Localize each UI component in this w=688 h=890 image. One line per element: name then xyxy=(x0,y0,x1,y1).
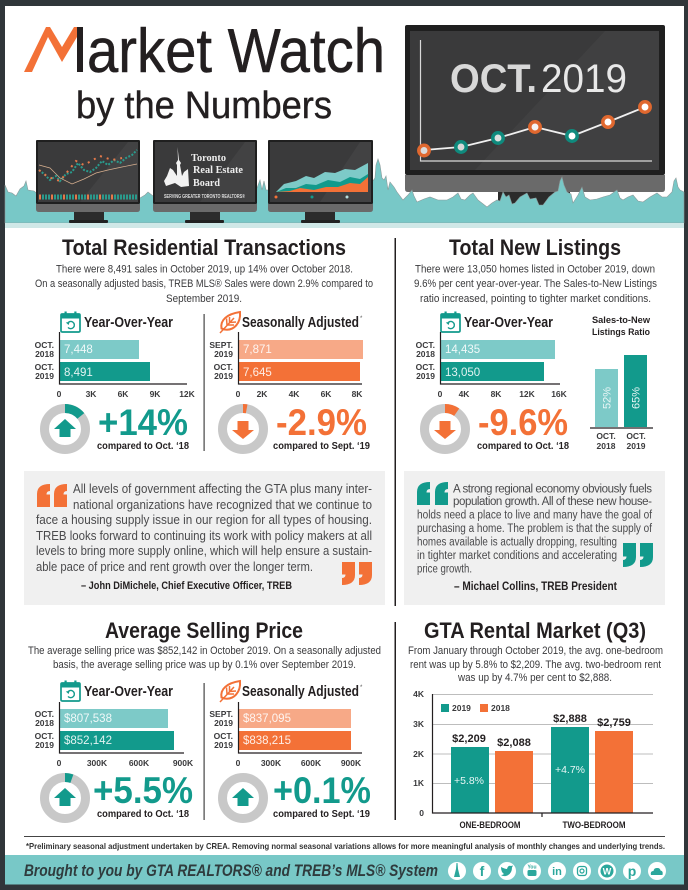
bar chart: rents: 2K xyxy=(413,749,425,759)
title xyxy=(24,17,385,127)
small monitor: market chart xyxy=(36,140,140,223)
year-over-year heading xyxy=(61,312,173,332)
bar chart: year-over-year price: 300K xyxy=(87,758,108,768)
year-over-year heading xyxy=(61,680,173,701)
bar chart: year-over-year price: $807,538 xyxy=(64,713,112,725)
bar chart: new listings: 2018 xyxy=(416,349,435,359)
quote: John DiMichele: national organizations have recognized that we continue to xyxy=(73,498,372,512)
panel: GTA rental market xyxy=(408,618,663,830)
quote: Michael Collins: population growth. All of these new house- xyxy=(453,496,652,508)
quote: Michael Collins: homes available is actually dropping, resulting xyxy=(417,536,617,548)
bar chart: rents: 0 xyxy=(419,808,424,818)
bar chart: seasonally adjusted sales: OCT. xyxy=(214,362,233,372)
donut: +14% xyxy=(44,408,86,450)
bar chart: seasonally adjusted sales: SEPT. xyxy=(209,340,233,350)
year-over-year heading: Year-Over-Year xyxy=(464,315,553,331)
stat: +5.5%: +5.5% xyxy=(93,770,193,811)
large monitor: Oct. 2019: 2019 xyxy=(541,57,627,101)
intro text: There were 13,050 homes listed in October 2019, down xyxy=(415,264,655,276)
year-over-year heading xyxy=(441,312,553,332)
intro text: 9.6% per cent year-over-year. The Sales-to-New Listings xyxy=(414,278,657,290)
bar chart: rents: 2019 xyxy=(452,703,471,713)
seasonally adjusted heading xyxy=(220,312,363,333)
stat: -9.6%: compared to Oct. ‘18 xyxy=(477,441,569,452)
quote: Michael Collins xyxy=(404,471,665,605)
small monitor: Toronto Real Estate Board logo xyxy=(153,140,257,223)
chart: sales-to-new listings ratio: 2018 xyxy=(597,441,616,451)
chart: sales-to-new listings ratio: 52% xyxy=(602,387,614,409)
panel: average selling price xyxy=(28,618,381,820)
social icons: f xyxy=(480,863,485,879)
quote: John DiMichele: able pace of price and rent growth over the longer term. xyxy=(36,560,313,574)
bar chart: year-over-year price: 2019 xyxy=(35,740,54,750)
bar chart: rents: +5.8% xyxy=(454,775,484,787)
heading: Total New Listings xyxy=(449,235,621,260)
bar chart: seasonally adjusted price: 900K xyxy=(341,758,362,768)
icon: open quote xyxy=(417,482,448,505)
bar chart: new listings: 0 xyxy=(438,389,443,399)
intro text xyxy=(28,645,381,671)
quote: John DiMichele xyxy=(24,471,385,605)
panel: total new listings xyxy=(414,235,657,452)
bar chart: new listings: 14,435 xyxy=(445,344,480,356)
quote: John DiMichele: All levels of government affecting the GTA plus many inter- xyxy=(73,482,372,496)
bar chart: year-over-year sales xyxy=(35,332,196,399)
chart: sales-to-new listings ratio: OCT. xyxy=(626,431,646,441)
footer band xyxy=(5,855,684,884)
seasonally adjusted heading: Seasonally Adjusted xyxy=(242,315,359,331)
stat: +14%: +14% xyxy=(98,402,188,443)
intro text xyxy=(414,264,657,305)
chart: sales-to-new listings ratio: OCT. xyxy=(596,431,616,441)
bar chart: seasonally adjusted sales xyxy=(209,332,363,399)
bar chart: rents: 3K xyxy=(413,719,425,729)
bar chart: new listings: OCT. xyxy=(416,340,435,350)
bar chart: seasonally adjusted price: 300K xyxy=(261,758,282,768)
small monitor: area chart xyxy=(268,140,373,223)
bar chart: year-over-year sales: 2019 xyxy=(35,371,54,381)
bar chart: year-over-year sales: 0 xyxy=(57,389,62,399)
intro text: September 2019. xyxy=(166,293,242,305)
bar chart: seasonally adjusted price: $837,095 xyxy=(243,713,291,725)
bar chart: year-over-year price: OCT. xyxy=(35,731,54,741)
bar chart: rents: $2,088 xyxy=(497,737,531,749)
bar chart: seasonally adjusted sales: 4K xyxy=(289,389,300,399)
bar chart: rents: 2018 xyxy=(491,703,510,713)
donut: +0.1% xyxy=(222,778,264,818)
quote: John DiMichele: face a housing supply issue in our region for all types of housing. xyxy=(36,513,372,527)
skyline xyxy=(5,159,684,228)
large monitor: Oct. 2019 xyxy=(405,25,665,208)
bar chart: seasonally adjusted price: $838,215 xyxy=(243,735,291,747)
icon: open quote xyxy=(37,484,67,507)
donut: -9.6% xyxy=(424,408,466,450)
bar chart: rents xyxy=(413,689,653,830)
title: by the Numbers xyxy=(76,85,332,127)
stat: -2.9%: -2.9% xyxy=(276,402,367,443)
bar chart: year-over-year sales: 2018 xyxy=(35,349,54,359)
bar chart: seasonally adjusted sales: 2K xyxy=(257,389,268,399)
seasonally adjusted heading: Seasonally Adjusted xyxy=(242,684,359,700)
social icons: W xyxy=(603,866,612,876)
social icons: You xyxy=(527,864,537,870)
bar chart: new listings: 8K xyxy=(491,389,502,399)
panel: total residential transactions xyxy=(35,235,373,452)
bar chart: year-over-year sales: OCT. xyxy=(35,362,54,372)
bar chart: rents: $2,209 xyxy=(452,733,486,745)
year-over-year heading: Year-Over-Year xyxy=(84,684,173,700)
bar chart: seasonally adjusted sales: 8K xyxy=(352,389,363,399)
intro text: There were 8,491 sales in October 2019, up 14% over October 2018. xyxy=(56,264,353,276)
intro text xyxy=(35,264,373,305)
bar chart: rents: ONE-BEDROOM xyxy=(460,820,520,830)
bar chart: new listings: 4K xyxy=(459,389,470,399)
bar chart: new listings: 16K xyxy=(551,389,568,399)
bar chart: seasonally adjusted price: OCT. xyxy=(214,731,233,741)
quote: Michael Collins: purchasing a home. The problem is that the supply of xyxy=(417,523,653,535)
icon: close quote xyxy=(623,543,653,567)
footer band: Brought to you by GTA REALTORS® and TREB’s MLS® System xyxy=(24,861,438,880)
bar chart: rents: 4K xyxy=(413,689,425,699)
donut: +5.5% xyxy=(44,778,86,818)
bar chart: seasonally adjusted price xyxy=(209,702,362,768)
bar chart: seasonally adjusted price: 2019 xyxy=(214,718,233,728)
bar chart: year-over-year price: 600K xyxy=(129,758,150,768)
bar chart: new listings: OCT. xyxy=(416,362,435,372)
quote: Michael Collins: in tighter market conditions and accelerating xyxy=(417,550,617,562)
bar chart: year-over-year sales: 8,491 xyxy=(64,367,93,379)
bar chart: seasonally adjusted sales: 7,645 xyxy=(243,367,272,379)
bar chart: new listings xyxy=(416,332,568,399)
bar chart: year-over-year price: 2018 xyxy=(35,718,54,728)
donut: -2.9% xyxy=(222,408,264,450)
stat: +0.1%: +0.1% xyxy=(273,770,371,811)
heading: GTA Rental Market (Q3) xyxy=(424,618,646,643)
social icons: in xyxy=(552,866,562,878)
intro text xyxy=(408,645,663,684)
bar chart: seasonally adjusted sales: 0 xyxy=(236,389,241,399)
stat: +14%: compared to Oct. ‘18 xyxy=(97,441,189,452)
heading: Total Residential Transactions xyxy=(62,235,346,260)
seasonally adjusted heading: * xyxy=(360,685,363,691)
bar chart: seasonally adjusted price: 2019 xyxy=(214,740,233,750)
title: arket Watch xyxy=(87,17,385,86)
small monitor: Toronto Real Estate Board logo: Toronto xyxy=(191,153,226,164)
bar chart: year-over-year sales: OCT. xyxy=(35,340,54,350)
quote: Michael Collins: holds need a place to live and many have the goal of xyxy=(417,510,653,522)
seasonally adjusted heading: * xyxy=(360,316,363,322)
bar chart: rents: 1K xyxy=(413,778,425,788)
intro text: was up by 4.7% per cent to $2,888. xyxy=(457,672,612,684)
intro text: On a seasonally adjusted basis, TREB MLS® Sales were down 2.9% compared to xyxy=(35,278,373,290)
bar chart: rents: $2,888 xyxy=(553,713,587,725)
small monitor: Toronto Real Estate Board logo: SERVING GREATER TORONTO REALTORS® xyxy=(164,193,245,200)
chart: sales-to-new listings ratio: 65% xyxy=(630,387,642,409)
bar chart: rents: +4.7% xyxy=(555,764,585,776)
chart: sales-to-new listings ratio: Listings Ratio xyxy=(592,327,650,338)
quote: John DiMichele: levels to bring more supply online, which will help ensure a sustain- xyxy=(36,544,372,558)
small monitor: Toronto Real Estate Board logo: Real Estate xyxy=(193,165,244,176)
intro text: rent was up by 5.8% to $2,209. The avg. two-bedroom rent xyxy=(410,659,661,671)
bar chart: new listings: 13,050 xyxy=(445,367,480,379)
social icons xyxy=(448,862,666,880)
chart: sales-to-new listings ratio xyxy=(590,315,653,451)
stat: -9.6%: -9.6% xyxy=(478,402,568,443)
bar chart: seasonally adjusted price: 0 xyxy=(236,758,241,768)
stat: -2.9%: compared to Sept. ‘19 xyxy=(273,441,370,452)
attribution: – John DiMichele, Chief Executive Officer, TREB xyxy=(81,580,292,592)
bar chart: year-over-year price: 0 xyxy=(57,758,62,768)
bar chart: seasonally adjusted sales: 7,871 xyxy=(243,344,272,356)
bar chart: seasonally adjusted sales: 6K xyxy=(321,389,332,399)
intro text: The average selling price was $852,142 in October 2019. On a seasonally adjusted xyxy=(28,645,381,657)
intro text: basis, the average selling price was up by 0.1% over September 2019. xyxy=(53,659,356,671)
quote: Michael Collins: A strong regional economy obviously fuels xyxy=(453,484,652,496)
bar chart: year-over-year sales: 7,448 xyxy=(64,344,93,356)
bar chart: year-over-year sales: 6K xyxy=(118,389,129,399)
bar chart: seasonally adjusted price: 600K xyxy=(301,758,322,768)
bar chart: new listings: 2019 xyxy=(416,371,435,381)
chart: sales-to-new listings ratio: 2019 xyxy=(627,441,646,451)
section dividers xyxy=(394,238,396,820)
bar chart: year-over-year sales: 3K xyxy=(86,389,97,399)
bar chart: year-over-year price: OCT. xyxy=(35,709,54,719)
bar chart: rents: TWO-BEDROOM xyxy=(562,820,626,830)
bar chart: year-over-year sales: 12K xyxy=(179,389,196,399)
year-over-year heading: Year-Over-Year xyxy=(84,315,173,331)
large monitor: Oct. 2019: OCT. xyxy=(450,57,537,101)
bar chart: year-over-year price: $852,142 xyxy=(64,735,112,747)
stat: +0.1%: compared to Sept. ‘19 xyxy=(273,809,370,820)
quote: John DiMichele: TREB looks forward to continuing its work with policy makers at all xyxy=(36,529,372,543)
bar chart: seasonally adjusted sales: 2019 xyxy=(214,349,233,359)
attribution: – Michael Collins, TREB President xyxy=(454,581,617,593)
bar chart: year-over-year sales: 9K xyxy=(150,389,161,399)
small monitor: Toronto Real Estate Board logo: Board xyxy=(193,178,220,189)
heading: Average Selling Price xyxy=(105,618,303,643)
bar chart: year-over-year price xyxy=(35,702,194,768)
bar chart: seasonally adjusted price: SEPT. xyxy=(209,709,233,719)
stat: +5.5%: compared to Oct. ‘18 xyxy=(97,809,189,820)
social icons: p xyxy=(628,863,636,879)
bar chart: seasonally adjusted sales: 2019 xyxy=(214,371,233,381)
chart: sales-to-new listings ratio: Sales-to-New xyxy=(592,315,651,326)
bar chart: rents: $2,759 xyxy=(597,717,631,729)
quote: Michael Collins: price growth. xyxy=(417,564,472,576)
bar chart: new listings: 12K xyxy=(519,389,536,399)
intro text: ratio increased, pointing to tighter market conditions. xyxy=(420,293,651,305)
bar chart: year-over-year price: 900K xyxy=(173,758,194,768)
seasonally adjusted heading xyxy=(220,681,363,702)
icon: close quote xyxy=(342,562,372,585)
